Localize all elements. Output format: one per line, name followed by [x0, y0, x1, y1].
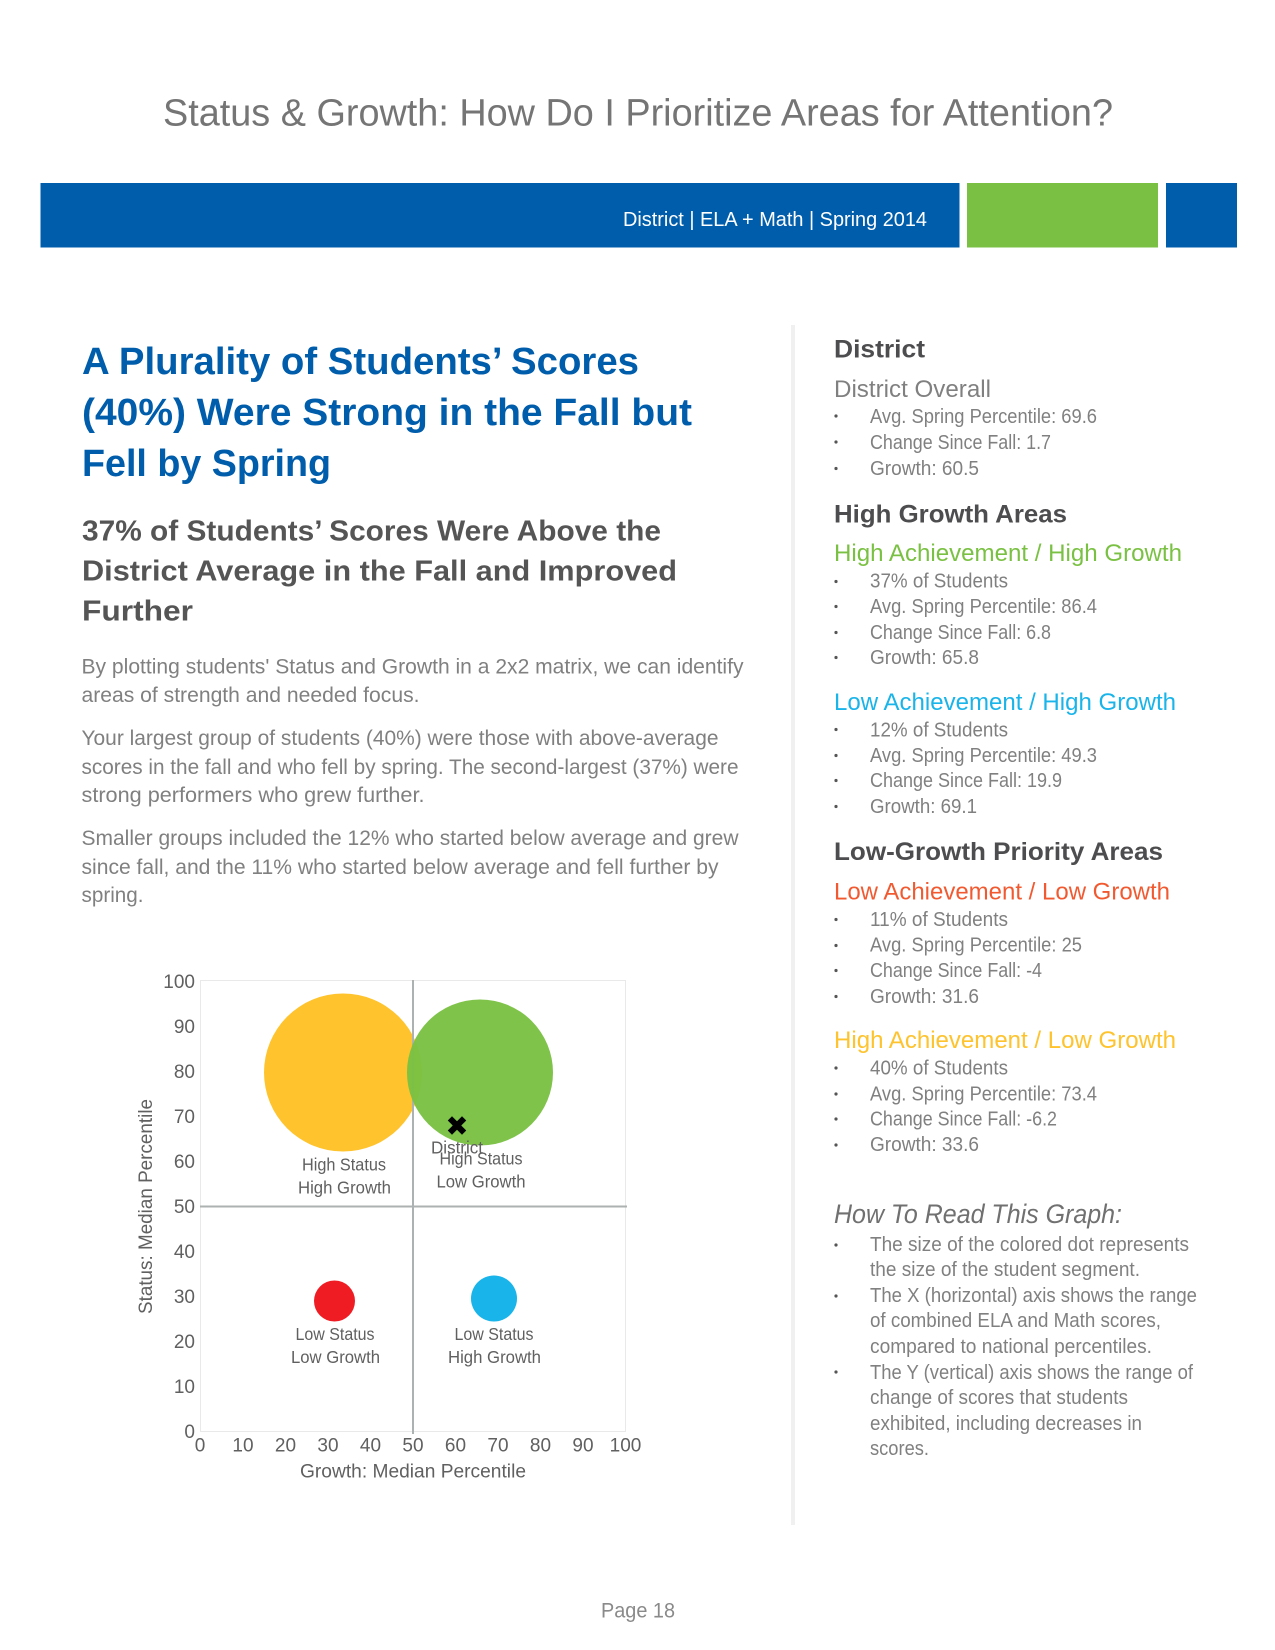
heading: district: District [834, 336, 926, 364]
data labels: High Status [302, 1154, 386, 1174]
data labels: High Status [440, 1148, 523, 1168]
y axis ticks: 70 [174, 1107, 195, 1128]
segment: low achievement high growth: Change Since Fall: 19.9 [870, 770, 1062, 792]
instructions list: of combined ELA and Math scores, [870, 1310, 1161, 1332]
y axis ticks: 80 [174, 1062, 195, 1083]
data labels: Low Growth [436, 1172, 526, 1192]
subheading: Further [82, 596, 193, 628]
segment: high achievement high growth [834, 540, 1182, 669]
chart: status and growth matrix [135, 972, 641, 1482]
x axis ticks: 60 [445, 1436, 466, 1456]
x axis ticks: 50 [402, 1436, 424, 1456]
paragraph: largest groups: strong performers who grew further. [82, 784, 424, 807]
marker: district [452, 1120, 462, 1130]
data labels: Low Growth [291, 1347, 380, 1367]
main heading [82, 341, 692, 485]
heading: low-growth priority areas: Low-Growth Priority Areas [834, 838, 1163, 866]
y axis ticks: 0 [184, 1422, 195, 1443]
y axis title: Status: Median Percentile [135, 1099, 157, 1314]
report filter label: District | ELA + Math | Spring 2014 [623, 209, 927, 231]
segment: low achievement low growth [834, 878, 1170, 1008]
segment: district overall: Growth: 60.5 [870, 458, 979, 480]
paragraph: largest groups: scores in the fall and who fell by spring. The second-largest (37%) were [82, 756, 738, 779]
y axis ticks: 60 [174, 1152, 195, 1173]
bubble: low status high growth [471, 1276, 517, 1322]
subheading: District Average in the Fall and Improved [82, 556, 677, 588]
segment: district overall: Avg. Spring Percentile: 69.6 [870, 406, 1097, 428]
segment: low achievement low growth: Low Achievement / Low Growth [834, 878, 1170, 906]
y axis ticks: 30 [174, 1287, 195, 1308]
instructions list: compared to national percentiles. [870, 1336, 1152, 1358]
x axis ticks: 90 [572, 1436, 594, 1456]
panel: high growth areas [834, 500, 1182, 818]
panel: low-growth priority areas [834, 838, 1176, 1156]
data labels [291, 1138, 541, 1367]
instructions list [870, 1234, 1197, 1460]
heading: high growth areas: High Growth Areas [834, 500, 1067, 528]
data labels: High Growth [298, 1178, 391, 1198]
segment: low achievement low growth: Change Since Fall: -4 [870, 960, 1042, 982]
data labels: Low Status [454, 1324, 534, 1344]
x axis ticks: 30 [317, 1436, 339, 1456]
intro paragraph: By plotting students' Status and Growth in a 2x2 matrix, we can identify [82, 656, 744, 678]
segment: low achievement low growth: Avg. Spring Percentile: 25 [870, 934, 1082, 956]
intro paragraph: areas of strength and needed focus. [82, 684, 420, 707]
segment: high achievement high growth: High Achievement / High Growth [834, 540, 1182, 567]
panel: how to read this graph [834, 1199, 1197, 1460]
segment: low achievement low growth: Growth: 31.6 [870, 986, 979, 1008]
segment: high achievement high growth: Change Since Fall: 6.8 [870, 622, 1051, 644]
segment: district overall: District Overall [834, 376, 991, 403]
segment: high achievement low growth: High Achievement / Low Growth [834, 1027, 1176, 1054]
y axis ticks: 90 [174, 1017, 195, 1038]
main heading: A Plurality of Students’ Scores [82, 341, 639, 383]
segment: low achievement high growth [834, 689, 1176, 818]
heading: how to read: How To Read This Graph: [834, 1199, 1122, 1229]
x axis ticks: 100 [610, 1436, 641, 1456]
y axis ticks [163, 972, 195, 1443]
page number: Page 18 [601, 1600, 675, 1622]
segment: high achievement high growth: 37% of Students [870, 570, 1008, 592]
x axis ticks [195, 1436, 641, 1456]
paragraph: smaller groups: since fall, and the 11% who started below average and fell further by [82, 856, 719, 879]
y axis ticks: 100 [163, 972, 195, 993]
data labels: High Growth [448, 1347, 541, 1367]
instructions list: The Y (vertical) axis shows the range of [870, 1362, 1193, 1384]
bubble: low status low growth [314, 1280, 355, 1322]
x axis ticks: 80 [530, 1436, 551, 1456]
panel: district overview [834, 336, 1097, 480]
y axis ticks: 50 [174, 1197, 195, 1218]
segment: high achievement low growth: Change Since Fall: -6.2 [870, 1108, 1057, 1130]
segment: low achievement high growth: Growth: 69.1 [870, 796, 977, 818]
title: Status & Growth: How Do I Prioritize Areas for Attention? [163, 92, 1113, 134]
instructions list: change of scores that students [870, 1387, 1128, 1409]
instructions list: exhibited, including decreases in [870, 1413, 1142, 1435]
instructions list: the size of the student segment. [870, 1259, 1140, 1281]
segment: high achievement low growth [834, 1027, 1176, 1156]
segment: district overall: Change Since Fall: 1.7 [870, 432, 1051, 454]
subheading [82, 516, 677, 628]
bubble: high status high growth [407, 1000, 553, 1146]
segment: high achievement low growth: Growth: 33.6 [870, 1134, 979, 1156]
y axis ticks: 20 [174, 1332, 195, 1353]
subheading: 37% of Students’ Scores Were Above the [82, 516, 661, 548]
segment: high achievement high growth: Growth: 65.8 [870, 647, 979, 669]
y axis ticks: 40 [174, 1242, 195, 1263]
x axis title: Growth: Median Percentile [300, 1460, 526, 1482]
data labels: District [431, 1138, 483, 1158]
paragraph: smaller groups [82, 827, 739, 907]
intro paragraph [82, 656, 744, 707]
instructions list: The X (horizontal) axis shows the range [870, 1285, 1197, 1307]
bubble: high status low growth [264, 994, 422, 1152]
segment: high achievement high growth: Avg. Spring Percentile: 86.4 [870, 596, 1097, 618]
main heading: (40%) Were Strong in the Fall but [82, 392, 692, 434]
segment: district overall [834, 376, 1097, 480]
paragraph: smaller groups: spring. [82, 884, 144, 907]
x axis ticks: 0 [195, 1436, 205, 1456]
instructions list: scores. [870, 1438, 929, 1460]
y axis ticks: 10 [174, 1377, 195, 1398]
segment: low achievement low growth: 11% of Students [870, 909, 1008, 931]
segment: high achievement low growth: Avg. Spring Percentile: 73.4 [870, 1084, 1097, 1106]
x axis ticks: 20 [275, 1436, 296, 1456]
segment: low achievement high growth: Avg. Spring Percentile: 49.3 [870, 745, 1097, 767]
x axis ticks: 10 [232, 1436, 254, 1456]
data labels: Low Status [296, 1324, 375, 1344]
instructions list: The size of the colored dot represents [870, 1234, 1189, 1256]
paragraph: largest groups: Your largest group of students (40%) were those with above-average [82, 727, 718, 750]
segment: low achievement high growth: Low Achievement / High Growth [834, 689, 1176, 716]
paragraph: largest groups [82, 727, 738, 807]
x axis ticks: 40 [360, 1436, 381, 1456]
segment: low achievement high growth: 12% of Students [870, 720, 1008, 742]
column divider [791, 325, 795, 1525]
header band [40, 183, 1237, 248]
segment: high achievement low growth: 40% of Students [870, 1058, 1008, 1080]
main heading: Fell by Spring [82, 443, 331, 485]
x axis ticks: 70 [487, 1436, 509, 1456]
paragraph: smaller groups: Smaller groups included the 12% who started below average and grew [82, 827, 739, 850]
